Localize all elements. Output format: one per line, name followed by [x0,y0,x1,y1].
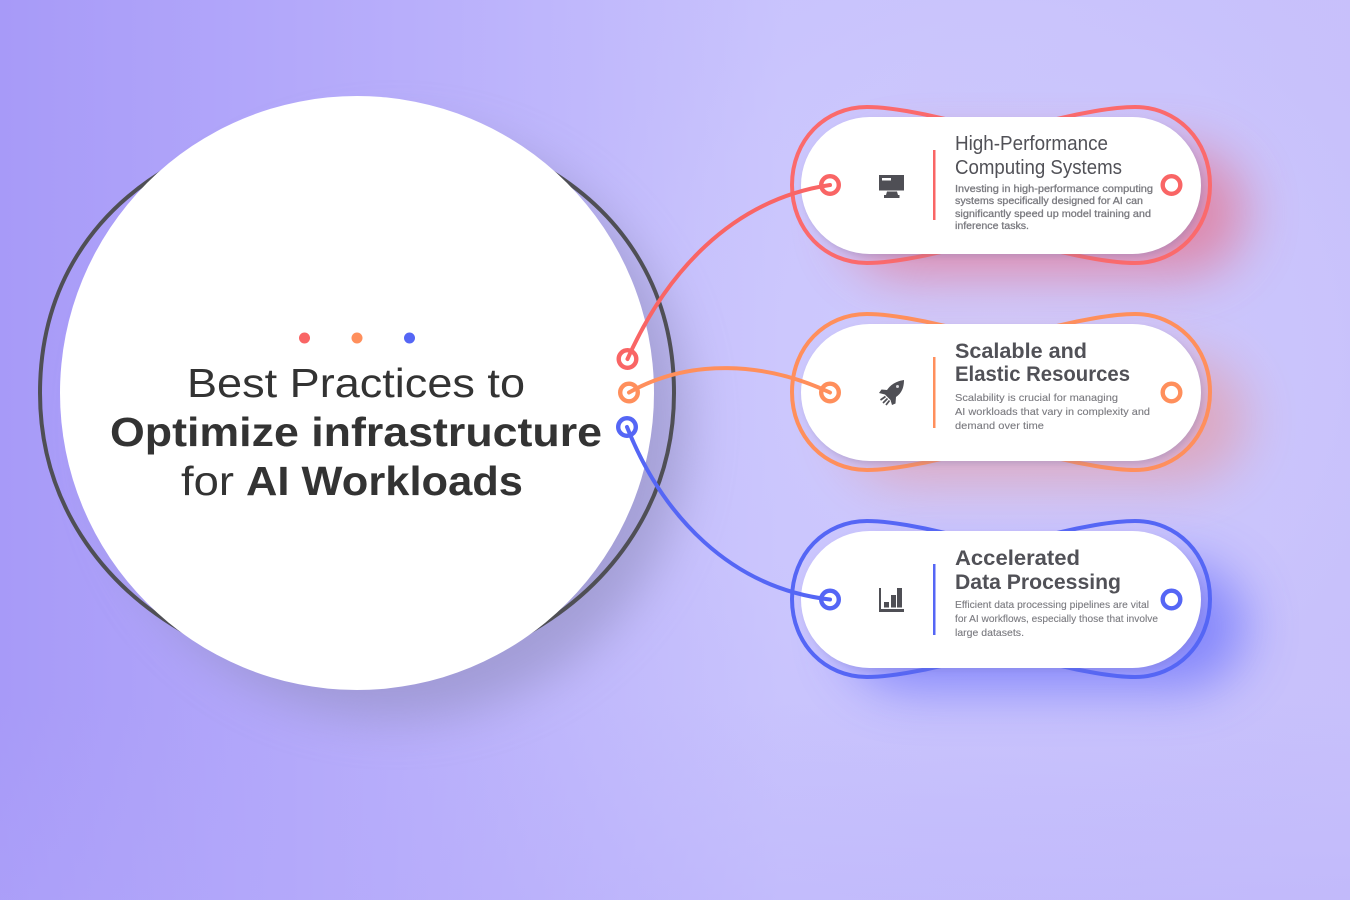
body text [955,599,1158,639]
panel: accelerated data processing card [792,521,1245,689]
title [110,360,602,504]
end marker [1163,384,1180,401]
white pill [801,324,1201,461]
circle shadow [102,132,688,718]
body text: Investing in high-performance computing [955,184,1153,195]
card outline [792,521,1210,677]
pill edge shadow [803,534,1203,671]
decorative dots [299,332,415,344]
pill edge shadow [803,120,1203,257]
connector: blue [618,418,839,608]
body text [955,184,1153,232]
panel: scalable resources card [792,314,1245,482]
body text: for AI workflows, especially those that involve [955,613,1158,625]
card outline [792,107,1210,263]
title: Best Practices to [187,360,525,406]
heading: Computing Systems [955,157,1122,179]
body text [955,392,1150,432]
pill edge shadow [803,327,1203,464]
title: for [181,458,234,504]
divider [933,150,936,220]
body text: Scalability is crucial for managing [955,392,1118,404]
panel: high-performance computing card [792,107,1245,275]
title: AI Workloads [246,458,523,504]
body text: inference tasks. [955,221,1029,232]
heading: Elastic Resources [955,363,1130,386]
connector: red [619,176,839,368]
body text: Efficient data processing pipelines are vital [955,599,1149,611]
icon: rocket [879,380,904,405]
end marker [1163,591,1180,608]
heading: Scalable and [955,340,1087,363]
body text: AI workloads that vary in complexity and [955,406,1150,418]
card outline [792,314,1210,470]
heading [955,133,1122,179]
white pill [801,531,1201,668]
body text: demand over time [955,420,1044,432]
connector: orange [620,368,839,401]
body text: significantly speed up model training and [955,209,1151,220]
divider [933,564,936,635]
heading: Accelerated [955,547,1080,570]
card shadow [845,564,1245,689]
end marker [1163,176,1180,194]
icon: monitor [879,175,904,198]
circle outline ring [40,166,674,634]
divider [933,357,936,428]
heading: Data Processing [955,571,1121,594]
body text: systems specifically designed for AI can [955,196,1143,207]
white circle [60,96,654,690]
card shadow [845,357,1245,482]
heading: High-Performance [955,133,1108,155]
white pill [801,117,1201,254]
icon: bar chart [879,588,904,612]
heading [955,547,1121,594]
heading [955,340,1130,386]
panel: central circle [40,96,688,718]
title: Optimize infrastructure [110,409,602,455]
card shadow [845,150,1245,275]
body text: large datasets. [955,627,1024,639]
